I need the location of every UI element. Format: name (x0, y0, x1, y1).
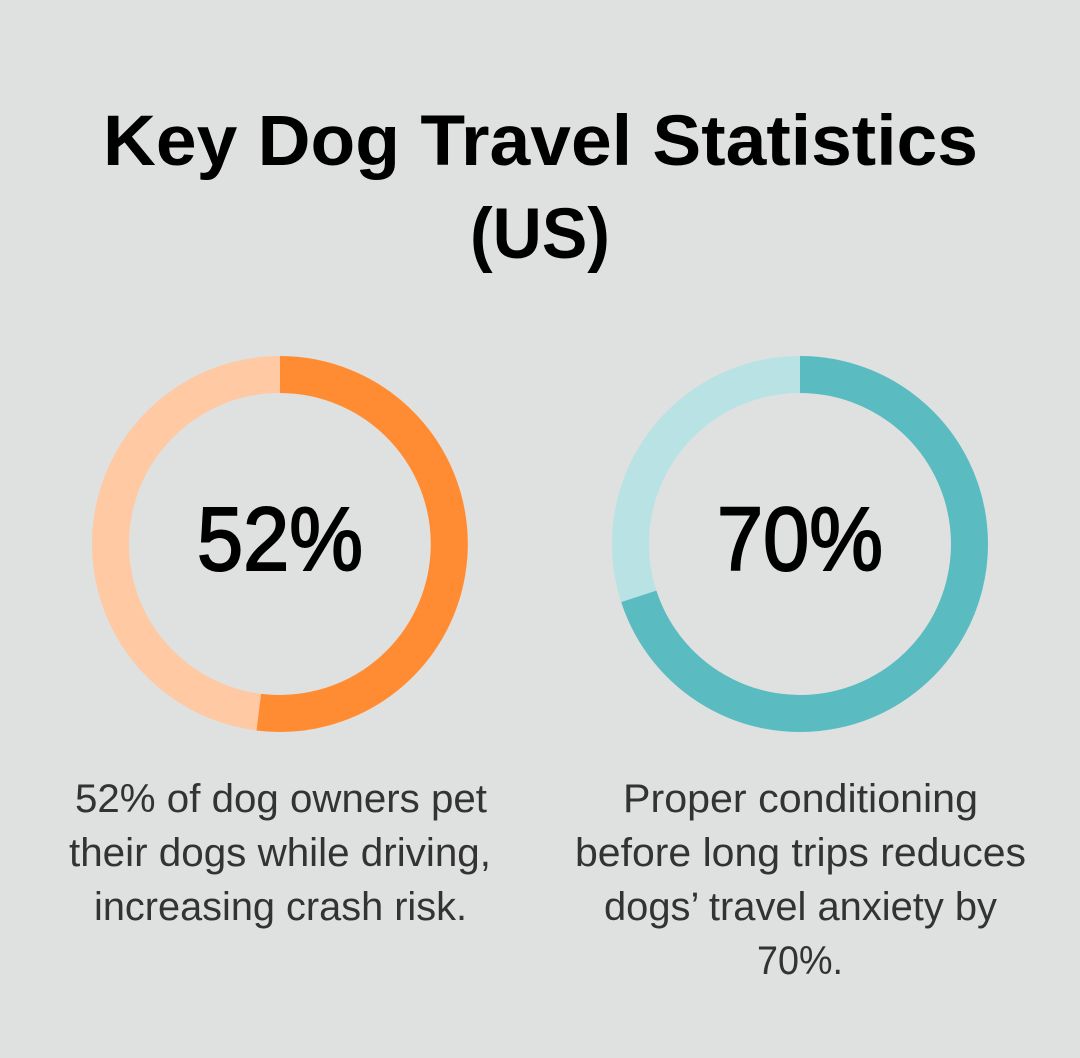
caption: 52% statistic: increasing crash risk. (94, 885, 467, 929)
panel: 52% statistic (69, 374, 491, 929)
title (103, 102, 978, 274)
caption: 52% statistic: 52% of dog owners pet (75, 777, 487, 821)
donut chart: 52% (110, 374, 450, 714)
caption: 70% statistic: dogs’ travel anxiety by (604, 885, 997, 929)
value: 70%: 70% (717, 490, 883, 590)
caption: 52% statistic (69, 777, 491, 929)
title: (US) (470, 195, 610, 274)
caption: 70% statistic (575, 777, 1026, 983)
caption: 70% statistic: before long trips reduces (575, 831, 1026, 875)
panel: 70% statistic (575, 374, 1026, 983)
caption: 52% statistic: their dogs while driving, (69, 831, 491, 875)
caption: 70% statistic: 70%. (757, 939, 843, 983)
caption: 70% statistic: Proper conditioning (623, 777, 978, 821)
value: 52%: 52% (197, 490, 363, 590)
donut chart: 70% (630, 374, 970, 714)
title: Key Dog Travel Statistics (103, 102, 978, 181)
